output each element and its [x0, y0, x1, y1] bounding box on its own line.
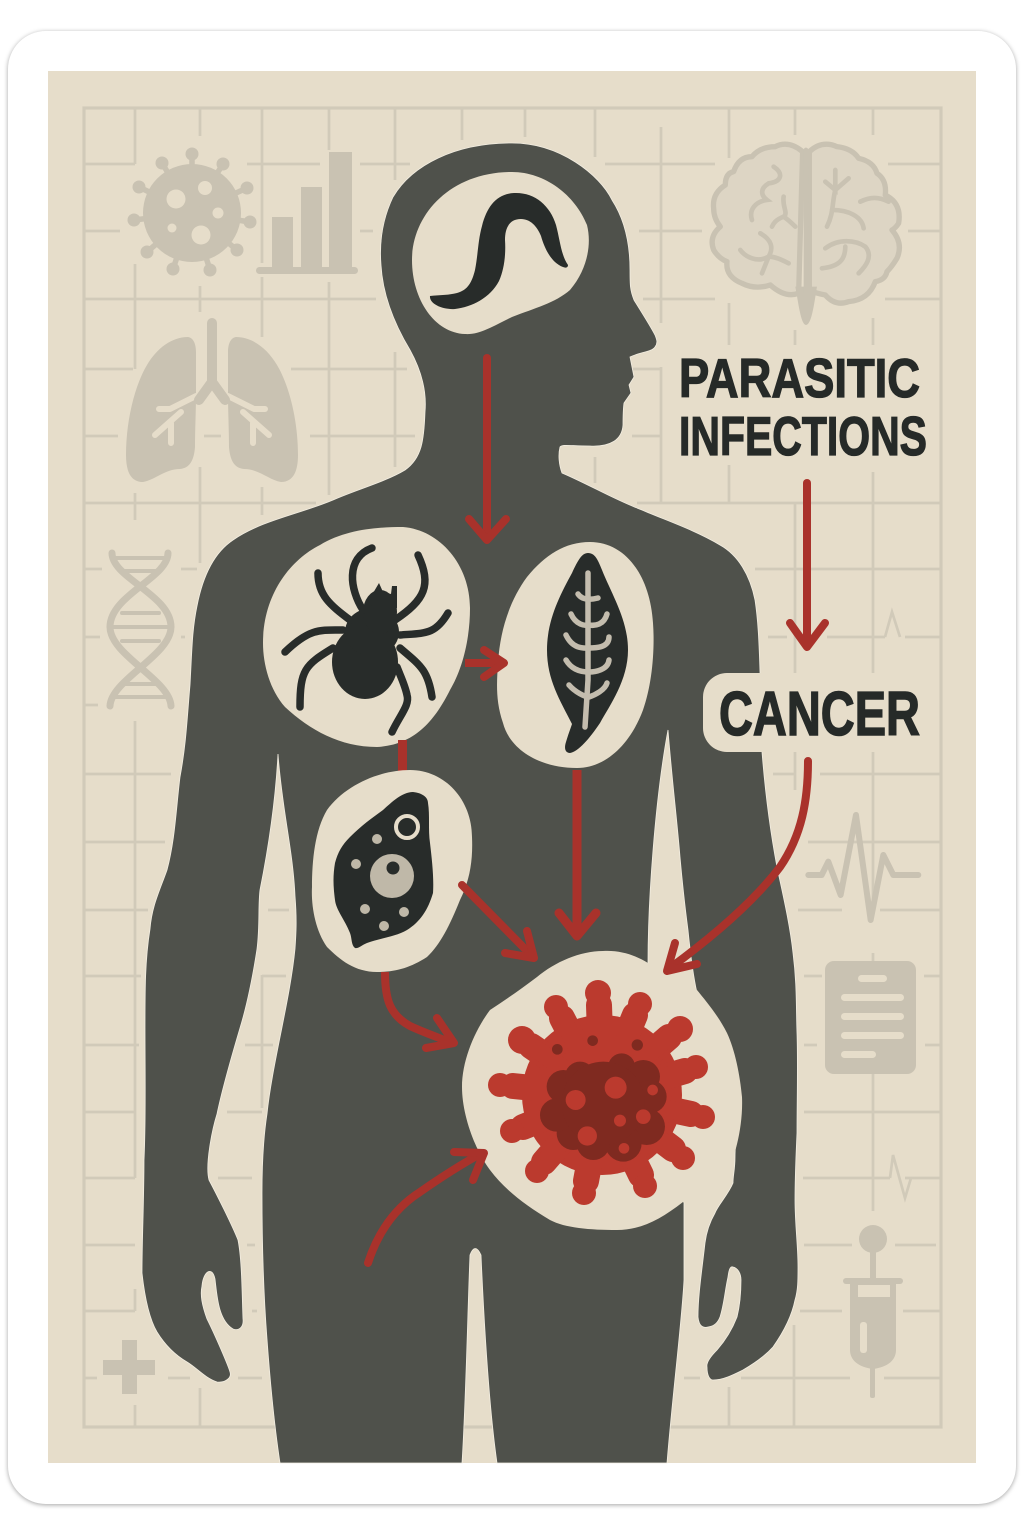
- icon: fluke: [547, 553, 628, 753]
- icon: medical cross: [103, 1340, 155, 1394]
- title: Parasitic Infections: PARASITIC: [679, 348, 920, 409]
- icon: tick: [285, 548, 448, 732]
- arrow: fluke to tumor: [559, 770, 596, 936]
- arrow: head to chest: [469, 358, 506, 540]
- arrow: infections to cancer: [790, 483, 825, 647]
- chest panel: leaf fluke: [497, 542, 654, 768]
- arrow: amoeba curve to tumor: [385, 972, 454, 1048]
- head panel: worm: [412, 172, 589, 334]
- title: Parasitic Infections: [679, 348, 927, 467]
- chest panel: tick: [263, 527, 470, 747]
- icon: document: [825, 961, 916, 1074]
- human silhouette: [142, 143, 798, 1463]
- icon: brain: [712, 144, 899, 325]
- icon: amoeba: [334, 792, 433, 948]
- icon: ECG pulse: [808, 815, 918, 920]
- icon: DNA helix: [110, 553, 171, 706]
- icon: syringe: [843, 1225, 903, 1398]
- icon: lungs: [126, 323, 298, 482]
- label: Cancer: CANCER: [719, 680, 920, 749]
- icon: bar chart: [256, 152, 358, 274]
- arrow: cancer to tumor: [667, 761, 808, 971]
- arrow: lower curve to tumor: [368, 1152, 484, 1263]
- tumor panel: [462, 951, 742, 1230]
- connector: tick to amoeba: [398, 740, 407, 772]
- icon: cancer cell: [488, 980, 715, 1205]
- label: Cancer: [703, 673, 925, 752]
- arrow: amoeba to tumor diagonal: [462, 885, 534, 958]
- title: Parasitic Infections: INFECTIONS: [679, 406, 927, 467]
- arrow: tick to fluke: [465, 650, 504, 677]
- icon: worm: [430, 193, 568, 309]
- chest panel: amoeba cell: [312, 770, 472, 972]
- icon: virus: [128, 148, 256, 276]
